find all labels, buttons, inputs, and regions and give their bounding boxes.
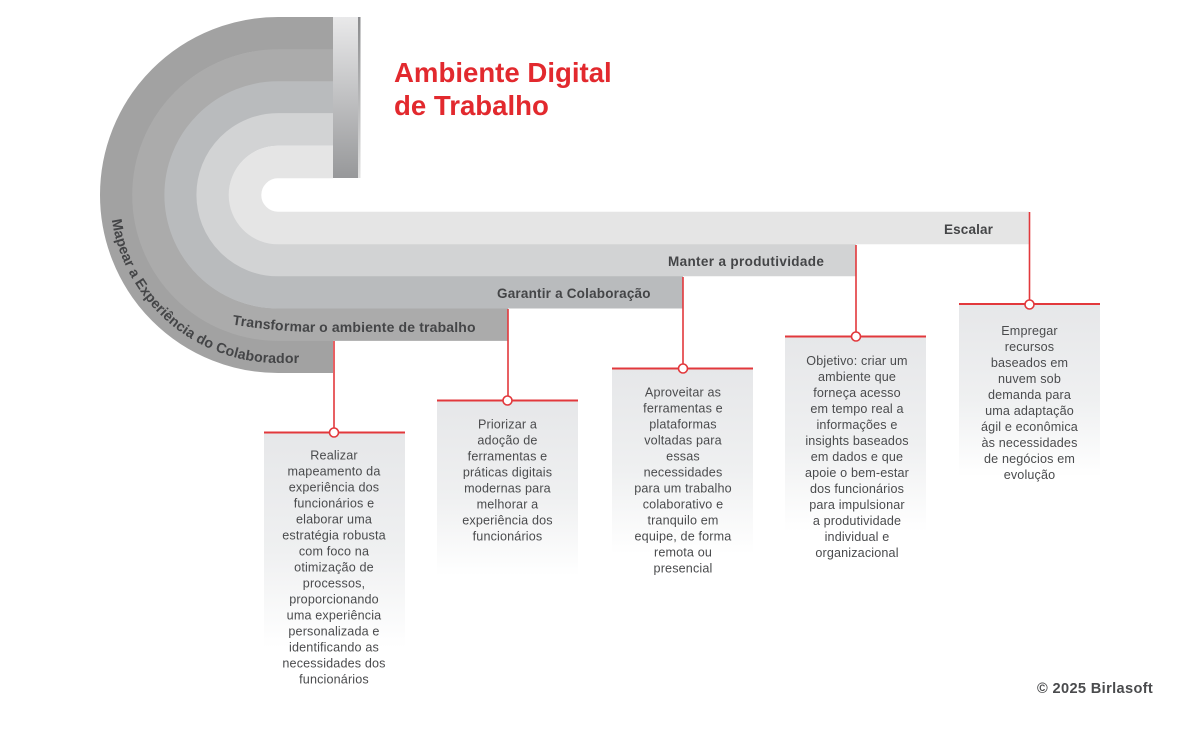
card 1 text: mapeamento da bbox=[288, 464, 380, 478]
card 4 text: dos funcionários bbox=[810, 482, 904, 496]
card 3 text: Aproveitar as bbox=[645, 386, 721, 400]
card 4 text: insights baseados bbox=[805, 434, 909, 448]
card 4 text: em dados e que bbox=[811, 450, 903, 464]
label: Escalar: Escalar bbox=[944, 222, 994, 237]
band: Transformar o ambiente de trabalho bbox=[148, 66, 508, 325]
card 4 text: forneça acesso bbox=[813, 386, 901, 400]
card 1 bbox=[264, 341, 405, 686]
label: Transformar o ambiente de trabalho: Transformar o ambiente de trabalho bbox=[234, 315, 475, 332]
band: Mapear a Experiência do Colaborador bbox=[116, 33, 333, 357]
card 5 text: baseados em bbox=[991, 356, 1068, 370]
card 5 text: às necessidades bbox=[981, 436, 1078, 450]
connector 5 bbox=[1028, 212, 1030, 304]
card 5 text: ágil e econômica bbox=[981, 420, 1078, 434]
card 2 text: melhorar a bbox=[477, 498, 538, 512]
card 4 text: informações e bbox=[816, 418, 898, 432]
card 3 top rule bbox=[612, 368, 753, 370]
label: Mapear a Experiência do Colaborador: Mapear a Experiência do Colaborador bbox=[112, 219, 299, 364]
card 4 text: organizacional bbox=[815, 546, 899, 560]
card 1 top rule bbox=[264, 432, 405, 434]
card 5 text: Empregar bbox=[1001, 324, 1058, 338]
copyright: © 2025 Birlasoft bbox=[1037, 681, 1153, 697]
card 3 text: essas bbox=[666, 450, 700, 464]
card 3 text: equipe, de forma bbox=[635, 530, 731, 544]
band: Manter a produtividade bbox=[213, 129, 856, 260]
connector 4 bbox=[855, 245, 857, 336]
card 2 bbox=[437, 309, 578, 576]
card 1 node bbox=[330, 428, 338, 437]
card 2 top rule bbox=[437, 400, 578, 402]
card 4 text: Objetivo: criar um bbox=[806, 354, 908, 368]
pipe diagram: concentric bands bbox=[116, 33, 1029, 357]
card 3 text: plataformas bbox=[649, 418, 717, 432]
card 2 text: experiência dos bbox=[462, 514, 553, 528]
band: Garantir a Colaboração bbox=[181, 98, 683, 292]
card 1 text: necessidades dos bbox=[282, 656, 386, 670]
card 3 node bbox=[678, 364, 688, 373]
card 4 node bbox=[852, 332, 860, 341]
card 1 text: elaborar uma bbox=[296, 512, 372, 526]
card 3 text: ferramentas e bbox=[643, 402, 723, 416]
card 5 text: uma adaptação bbox=[985, 404, 1074, 418]
card 4 text: para impulsionar bbox=[809, 498, 905, 512]
card 2 text: Priorizar a bbox=[478, 418, 537, 432]
label: Garantir a Colaboração: Garantir a Colaboração bbox=[497, 286, 651, 301]
card 3 bbox=[612, 277, 753, 576]
card 3 text: tranquilo em bbox=[647, 514, 719, 528]
card 1 text: uma experiência bbox=[287, 608, 381, 622]
card 3 text: para um trabalho bbox=[634, 482, 732, 496]
card 2 text: modernas para bbox=[464, 482, 551, 496]
card 5 text: evolução bbox=[1004, 468, 1055, 482]
card 3 text: voltadas para bbox=[644, 434, 722, 448]
card 1 text: proporcionando bbox=[289, 592, 379, 606]
card 4 text: ambiente que bbox=[818, 370, 896, 384]
card 1 text: funcionários e bbox=[294, 496, 374, 510]
card 1 text: experiência dos bbox=[289, 480, 379, 494]
card 4 bbox=[785, 245, 926, 560]
card 2 text: práticas digitais bbox=[463, 466, 552, 480]
card 1 text: personalizada e bbox=[288, 624, 380, 638]
card 5 node bbox=[1025, 300, 1034, 309]
card 3 text: remota ou bbox=[654, 546, 712, 560]
card 5 text: demanda para bbox=[988, 388, 1071, 402]
card 1 text: Realizar bbox=[310, 448, 358, 462]
label: Manter a produtividade: Manter a produtividade bbox=[668, 254, 824, 269]
card 2 text: adoção de bbox=[477, 434, 538, 448]
card 5 text: nuvem sob bbox=[998, 372, 1061, 386]
card 2 text: funcionários bbox=[473, 530, 542, 544]
connector 3 bbox=[682, 277, 684, 368]
card 4 top rule bbox=[785, 336, 926, 338]
card 3 text: colaborativo e bbox=[643, 498, 723, 512]
connector 1 bbox=[333, 341, 335, 432]
card 2 text: ferramentas e bbox=[468, 450, 547, 464]
gradient end bar bbox=[333, 17, 360, 178]
card 5 text: de negócios em bbox=[984, 452, 1075, 466]
card 3 text: presencial bbox=[654, 562, 712, 576]
card 1 text: funcionários bbox=[299, 672, 369, 686]
card 2 node bbox=[503, 396, 512, 405]
card 5 bbox=[959, 212, 1100, 482]
card 5 top rule bbox=[959, 303, 1100, 305]
card 1 text: com foco na bbox=[299, 544, 369, 558]
card 1 text: otimização de bbox=[294, 560, 374, 574]
card 5 text: recursos bbox=[1005, 340, 1054, 354]
card 4 text: em tempo real a bbox=[810, 402, 904, 416]
card 3 text: necessidades bbox=[644, 466, 722, 480]
title: Ambiente Digital bbox=[394, 57, 612, 88]
card 1 text: processos, bbox=[303, 576, 365, 590]
card 4 text: apoie o bem-estar bbox=[805, 466, 909, 480]
connector 2 bbox=[507, 309, 509, 400]
card 1 text: estratégia robusta bbox=[282, 528, 386, 542]
card 4 text: a produtividade bbox=[813, 514, 901, 528]
title: de Trabalho bbox=[394, 90, 549, 121]
band: Escalar bbox=[245, 162, 1029, 228]
card 4 text: individual e bbox=[825, 530, 889, 544]
card 1 text: identificando as bbox=[289, 640, 379, 654]
